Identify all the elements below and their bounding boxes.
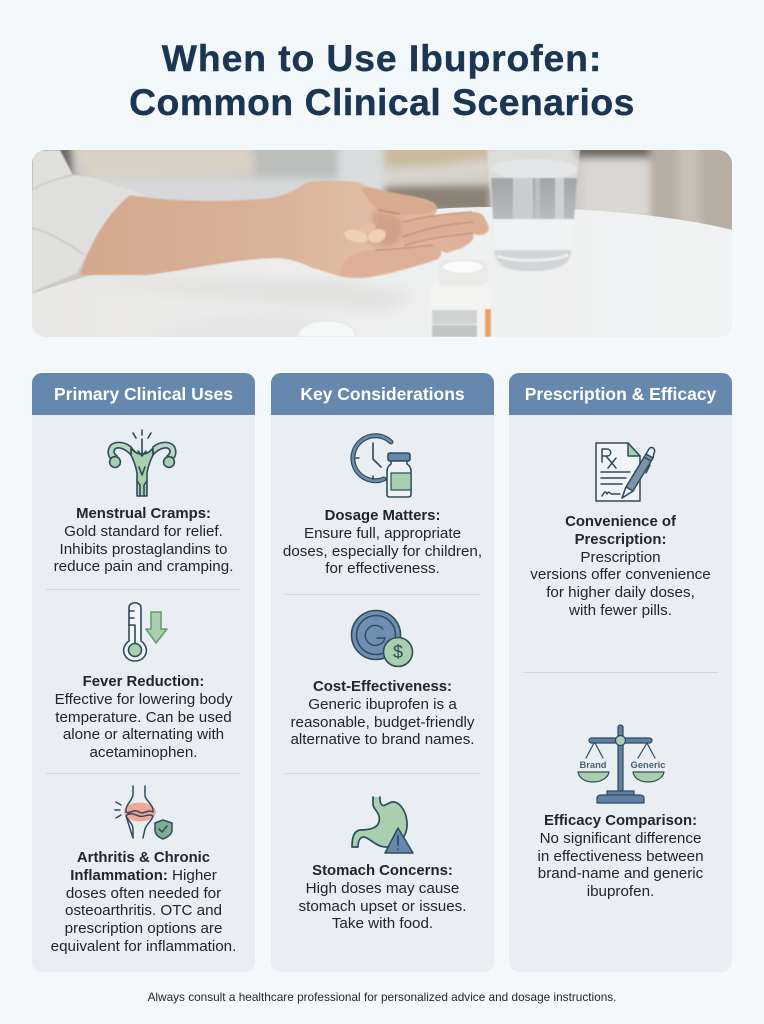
panel heading: Key Considerations	[300, 384, 465, 404]
text: menstrual cramps: Gold standard for relief.	[64, 523, 223, 540]
text: efficacy comparison: brand-name and generic	[538, 865, 703, 882]
text: efficacy comparison: ibuprofen.	[587, 883, 654, 900]
text: efficacy comparison: No significant difference	[540, 830, 701, 847]
text: arthritis and chronic inflammation: Inflammation: Higher	[70, 867, 217, 884]
text: fever reduction: temperature. Can be used	[55, 709, 232, 726]
text: fever reduction: alone or alternating with	[63, 726, 224, 743]
icon: coin with dollar badge	[350, 610, 414, 668]
icon: clock and medicine bottle	[350, 433, 412, 498]
bottle	[484, 308, 492, 337]
title: Common Clinical Scenarios	[129, 81, 635, 123]
icon: balance scale brand vs generic: Generic	[631, 759, 665, 770]
title: When to Use Ibuprofen:	[162, 37, 602, 79]
panel heading	[32, 373, 255, 415]
icon: inflamed knee joint with shield	[114, 785, 173, 840]
text: stomach concerns: stomach upset or issues.	[298, 898, 466, 915]
text: efficacy comparison	[537, 813, 704, 900]
text: convenience of prescription: for higher daily doses,	[546, 584, 695, 601]
text: arthritis and chronic inflammation: equivalent for inflammation.	[51, 938, 236, 955]
text: cost-effectiveness: Cost-Effectiveness:	[313, 679, 452, 695]
text: arthritis and chronic inflammation: doses often needed for	[66, 885, 221, 902]
text: stomach concerns	[298, 863, 466, 932]
text: dosage matters: Ensure full, appropriate	[304, 525, 461, 542]
icon: stomach with warning triangle	[351, 796, 414, 854]
text: cost-effectiveness: alternative to brand names.	[290, 731, 475, 748]
text: dosage matters	[283, 508, 482, 577]
panel: prescription and efficacy	[509, 373, 732, 972]
text: arthritis and chronic inflammation: prescription options are	[65, 920, 222, 937]
text: efficacy comparison: in effectiveness between	[537, 848, 704, 865]
text: convenience of prescription: Prescription	[580, 549, 661, 566]
text: convenience of prescription: with fewer pills.	[569, 602, 672, 619]
text: stomach concerns: Take with food.	[332, 915, 433, 932]
glass	[486, 150, 580, 207]
palm shading	[360, 188, 437, 215]
text: fever reduction: acetaminophen.	[89, 744, 198, 761]
text: menstrual cramps: Menstrual Cramps:	[76, 506, 211, 522]
panel heading	[509, 373, 732, 415]
photo: hand holding pills beside a glass of water and a pill bottle	[32, 150, 732, 337]
panel heading: Primary Clinical Uses	[54, 384, 233, 404]
text: convenience of prescription: versions offer convenience	[530, 566, 711, 583]
pills	[344, 229, 368, 243]
icon: coin with dollar badge: $	[393, 642, 403, 662]
icon: uterus with cramp arrow	[107, 429, 177, 497]
text: fever reduction	[55, 674, 232, 761]
text: dosage matters: doses, especially for children,	[283, 543, 482, 560]
footer disclaimer: Always consult a healthcare professional for personalized advice and dosage instructions.	[148, 990, 616, 1004]
icon: prescription pad and pen	[595, 442, 656, 502]
icon: balance scale brand vs generic	[577, 724, 666, 804]
text: convenience of prescription: Prescription:	[575, 532, 666, 548]
sleeve	[32, 150, 145, 293]
panel: primary clinical uses	[32, 373, 255, 972]
text: arthritis and chronic inflammation: osteoarthritis. OTC and	[65, 902, 222, 919]
text: efficacy comparison: Efficacy Comparison:	[544, 813, 697, 829]
text: menstrual cramps: reduce pain and cramping.	[54, 558, 233, 575]
text: fever reduction: Fever Reduction:	[83, 674, 204, 690]
panel heading: Prescription & Efficacy	[525, 384, 716, 404]
text: cost-effectiveness: reasonable, budget-friendly	[290, 714, 475, 731]
panel heading	[271, 373, 494, 415]
text: convenience of prescription: Convenience of	[565, 514, 676, 530]
text: dosage matters: for effectiveness.	[325, 560, 440, 577]
icon: balance scale brand vs generic: Brand	[579, 759, 607, 770]
text: stomach concerns: High doses may cause	[306, 880, 459, 897]
text: menstrual cramps	[54, 506, 233, 575]
text: fever reduction: Effective for lowering body	[55, 691, 232, 708]
arm and hand silhouette	[80, 181, 489, 278]
text: cost-effectiveness	[290, 679, 475, 748]
text: arthritis and chronic inflammation	[51, 850, 236, 955]
text: arthritis and chronic inflammation: Arthritis & Chronic	[77, 850, 210, 866]
text: dosage matters: Dosage Matters:	[325, 508, 440, 524]
text: cost-effectiveness: Generic ibuprofen is a	[308, 696, 457, 713]
text: convenience of prescription	[530, 514, 711, 619]
panel: key considerations	[271, 373, 494, 972]
icon: thermometer with down arrow	[122, 602, 168, 662]
title	[129, 37, 635, 123]
text: menstrual cramps: Inhibits prostaglandins to	[59, 541, 228, 558]
text: stomach concerns: Stomach Concerns:	[312, 863, 453, 879]
